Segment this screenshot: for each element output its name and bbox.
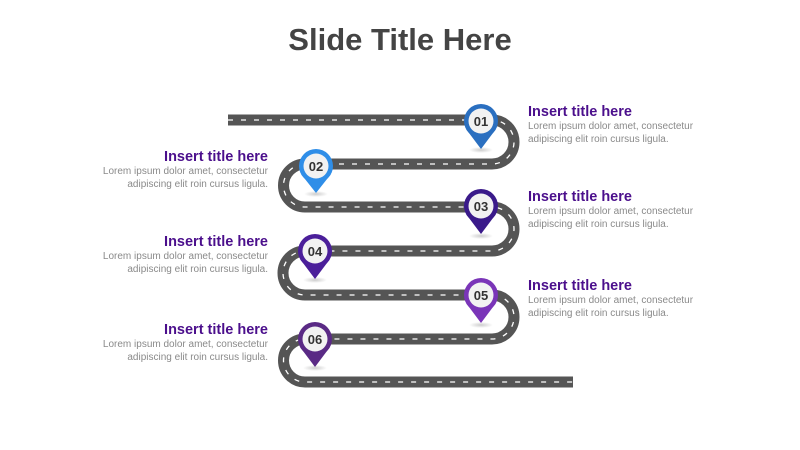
text 02: Lorem ipsum dolor amet, consectetur (103, 166, 268, 177)
marker 05 (464, 278, 498, 328)
marker 01: 01 (474, 114, 488, 129)
text 04: adipiscing elit roin cursus ligula. (127, 264, 268, 274)
text 03: Insert title here (528, 189, 632, 205)
text 01: Lorem ipsum dolor amet, consectetur (528, 121, 693, 132)
text 04: Lorem ipsum dolor amet, consectetur (103, 251, 268, 262)
marker 01 (464, 104, 498, 153)
text 03: Lorem ipsum dolor amet, consectetur (528, 206, 693, 217)
marker 02: 02 (309, 159, 323, 174)
text 05: adipiscing elit roin cursus ligula. (528, 308, 669, 318)
text 06: Lorem ipsum dolor amet, consectetur (103, 339, 268, 350)
text 05: Insert title here (528, 278, 632, 294)
text 06: adipiscing elit roin cursus ligula. (127, 352, 268, 362)
marker 03 (464, 189, 498, 239)
text 05 (528, 278, 693, 318)
marker 06 (298, 322, 332, 371)
text 04 (103, 234, 268, 274)
text 02 (103, 149, 268, 190)
marker 04: 04 (308, 244, 323, 259)
text 06: Insert title here (164, 322, 268, 338)
title: Slide Title Here (288, 22, 512, 57)
marker 05: 05 (474, 288, 488, 303)
text 01: adipiscing elit roin cursus ligula. (528, 134, 669, 144)
text 02: adipiscing elit roin cursus ligula. (127, 178, 268, 190)
marker 03: 03 (474, 199, 488, 214)
marker 02 (299, 149, 333, 197)
text 03: adipiscing elit roin cursus ligula. (528, 218, 669, 230)
text 04: Insert title here (164, 234, 268, 250)
text 02: Insert title here (164, 149, 268, 165)
marker 06: 06 (308, 332, 322, 347)
marker 04 (298, 234, 332, 283)
text 05: Lorem ipsum dolor amet, consectetur (528, 295, 693, 306)
text 03 (528, 189, 693, 230)
text 06 (103, 322, 268, 362)
text 01: Insert title here (528, 104, 632, 120)
text 01 (528, 104, 693, 144)
